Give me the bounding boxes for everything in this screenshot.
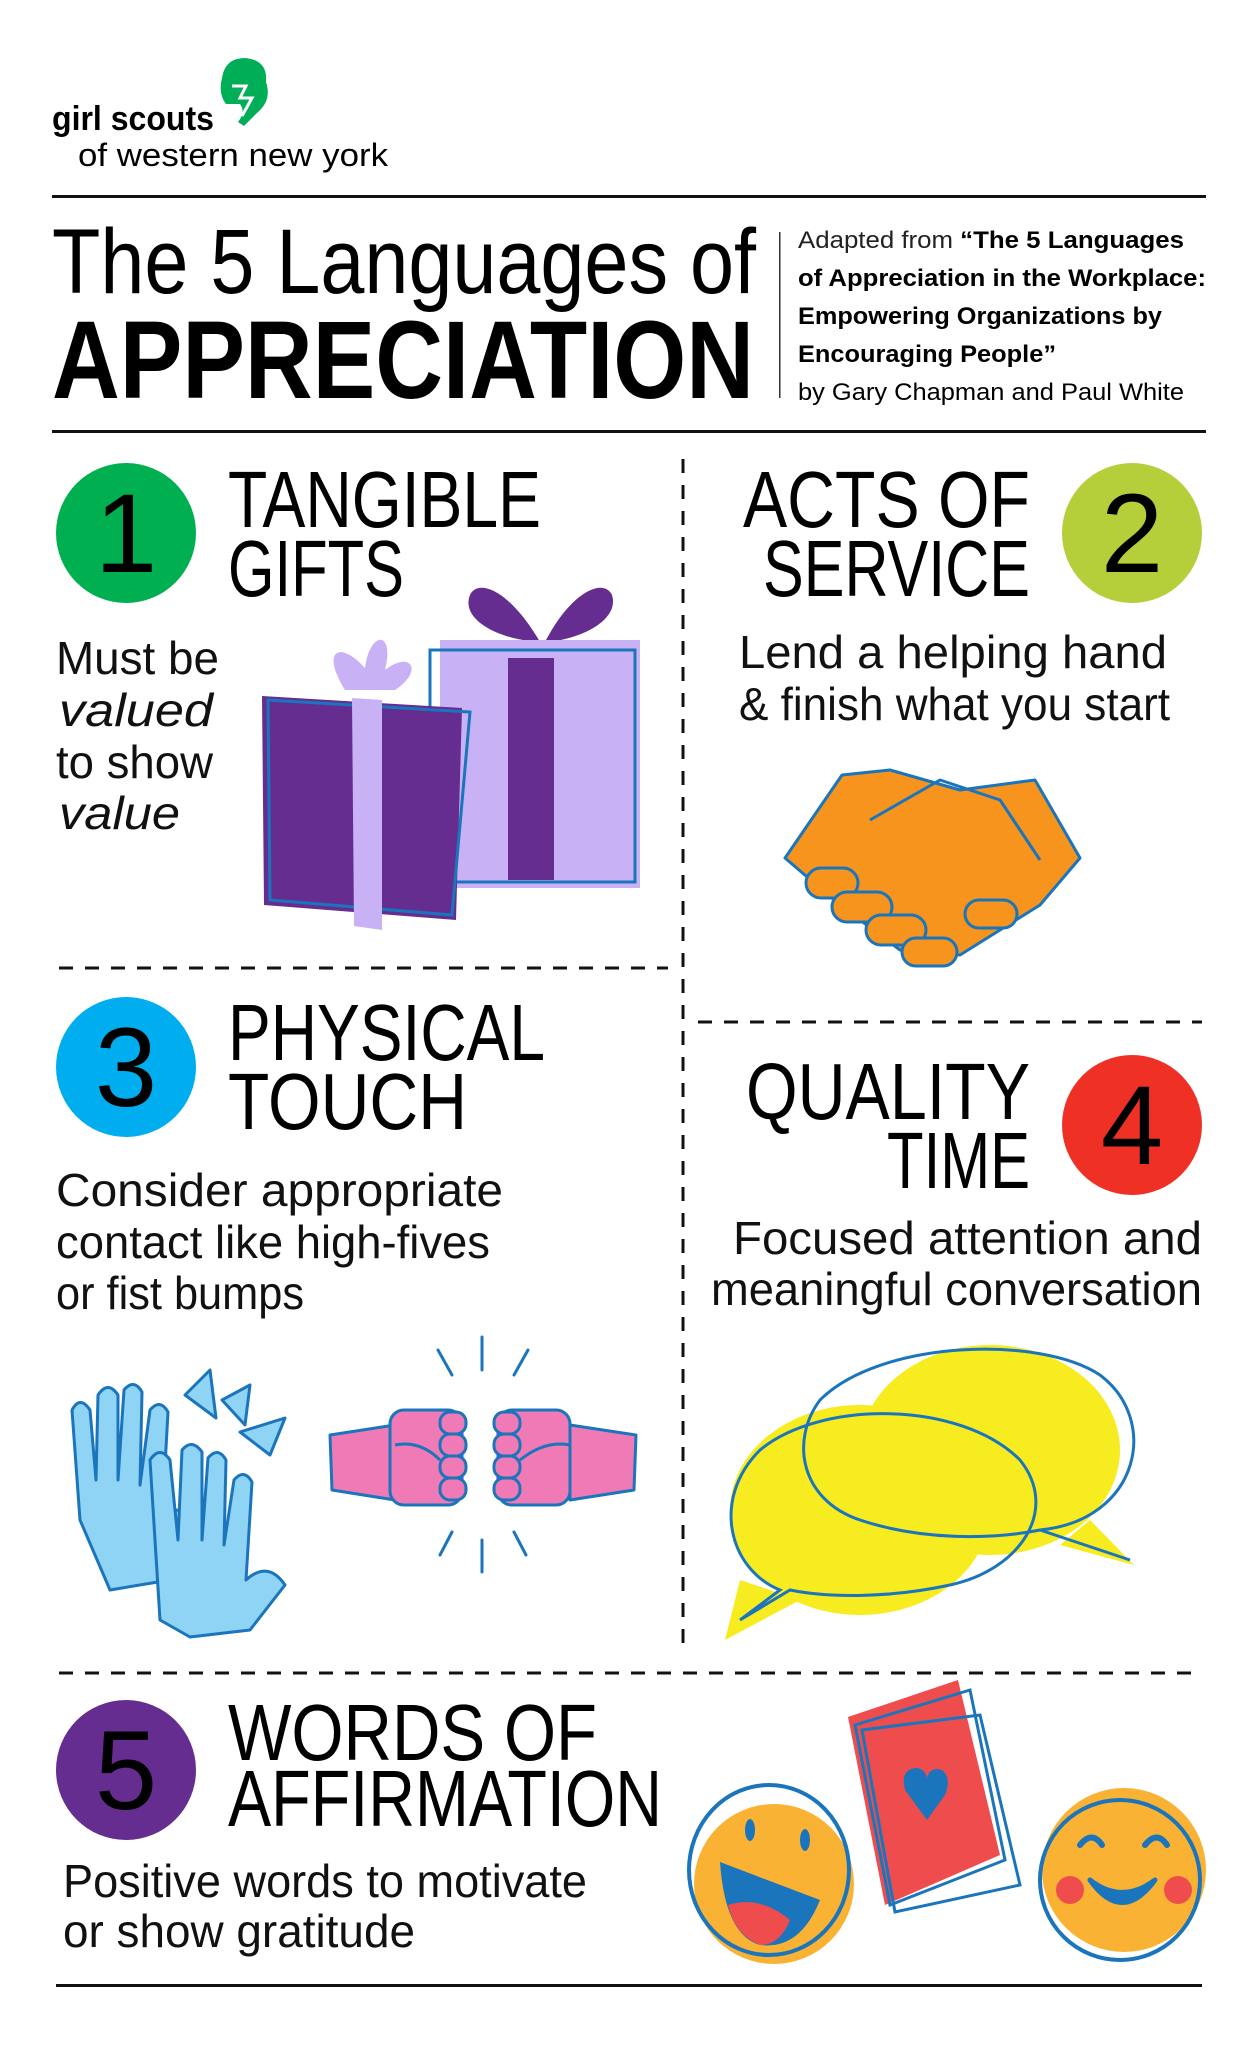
number 5: [56, 1700, 196, 1840]
number 5: 5: [95, 1708, 157, 1833]
heading: [743, 455, 1030, 613]
text: [56, 1164, 503, 1319]
source note: of Appreciation in the Workplace:: [798, 265, 1206, 292]
number 2: 2: [1101, 471, 1163, 596]
logo: girl scouts: girl scouts: [52, 100, 214, 138]
title: [52, 211, 756, 422]
text: [739, 626, 1170, 730]
text: & finish what you start: [739, 678, 1170, 730]
dividers: [59, 459, 1202, 1673]
icon: fist bump: [330, 1337, 636, 1572]
heading: TANGIBLE: [228, 455, 541, 544]
text: value: [59, 787, 180, 839]
number 1: [56, 463, 196, 603]
panel: physical touch: [56, 988, 636, 1637]
heading: QUALITY: [746, 1047, 1030, 1136]
text: valued: [59, 684, 215, 736]
heading: [228, 1688, 662, 1843]
heading: GIFTS: [228, 524, 404, 613]
title: APPRECIATION: [52, 299, 754, 422]
number 1: 1: [95, 471, 157, 596]
text: Must be: [56, 632, 219, 684]
text: [56, 632, 219, 839]
heading: TOUCH: [228, 1057, 467, 1146]
heading: TIME: [887, 1116, 1030, 1205]
panel: acts of service: [739, 455, 1202, 966]
icon: laughing emoji: [689, 1785, 854, 1964]
number 2: [1062, 463, 1202, 603]
heading: [228, 455, 541, 613]
text: meaningful conversation: [711, 1263, 1202, 1315]
text: contact like high-fives: [56, 1216, 490, 1268]
text: Consider appropriate: [56, 1164, 503, 1216]
icon: handshake: [785, 770, 1080, 966]
logo: girl scouts: of western new york: [78, 137, 389, 173]
panel: quality time: [711, 1047, 1202, 1640]
panel: words of affirmation: [56, 1680, 1206, 1964]
icon: speech bubbles: [725, 1345, 1134, 1640]
source note: Adapted from “The 5 Languages: [798, 227, 1184, 254]
heading: ACTS OF: [743, 455, 1030, 544]
text: [63, 1855, 587, 1957]
source note: [798, 227, 1206, 406]
text: [711, 1212, 1202, 1315]
heading: [228, 988, 545, 1146]
text: or show gratitude: [63, 1905, 415, 1957]
icon: smiling emoji: [1040, 1788, 1206, 1960]
number 4: [1062, 1055, 1202, 1195]
number 3: [56, 997, 196, 1137]
panel: tangible gifts: [56, 455, 640, 930]
text: Lend a helping hand: [739, 626, 1167, 678]
icon: gifts: [262, 588, 640, 930]
heading: SERVICE: [763, 524, 1030, 613]
heading: PHYSICAL: [228, 988, 545, 1077]
title: The 5 Languages of: [52, 211, 756, 313]
heading: AFFIRMATION: [228, 1754, 662, 1843]
icon: trefoil: [221, 58, 268, 126]
text: or fist bumps: [56, 1267, 304, 1319]
icon: card: [848, 1680, 1020, 1912]
heading: [746, 1047, 1030, 1205]
source note: Encouraging People”: [798, 341, 1056, 368]
heading: WORDS OF: [228, 1688, 597, 1777]
text: to show: [56, 736, 214, 788]
text: Positive words to motivate: [63, 1855, 587, 1907]
number 4: 4: [1101, 1063, 1163, 1188]
logo: girl scouts: [52, 58, 389, 173]
icon: high five: [72, 1370, 285, 1637]
source note: Empowering Organizations by: [798, 303, 1163, 330]
text: Focused attention and: [733, 1212, 1202, 1264]
source note: by Gary Chapman and Paul White: [798, 379, 1184, 406]
number 3: 3: [95, 1005, 157, 1130]
